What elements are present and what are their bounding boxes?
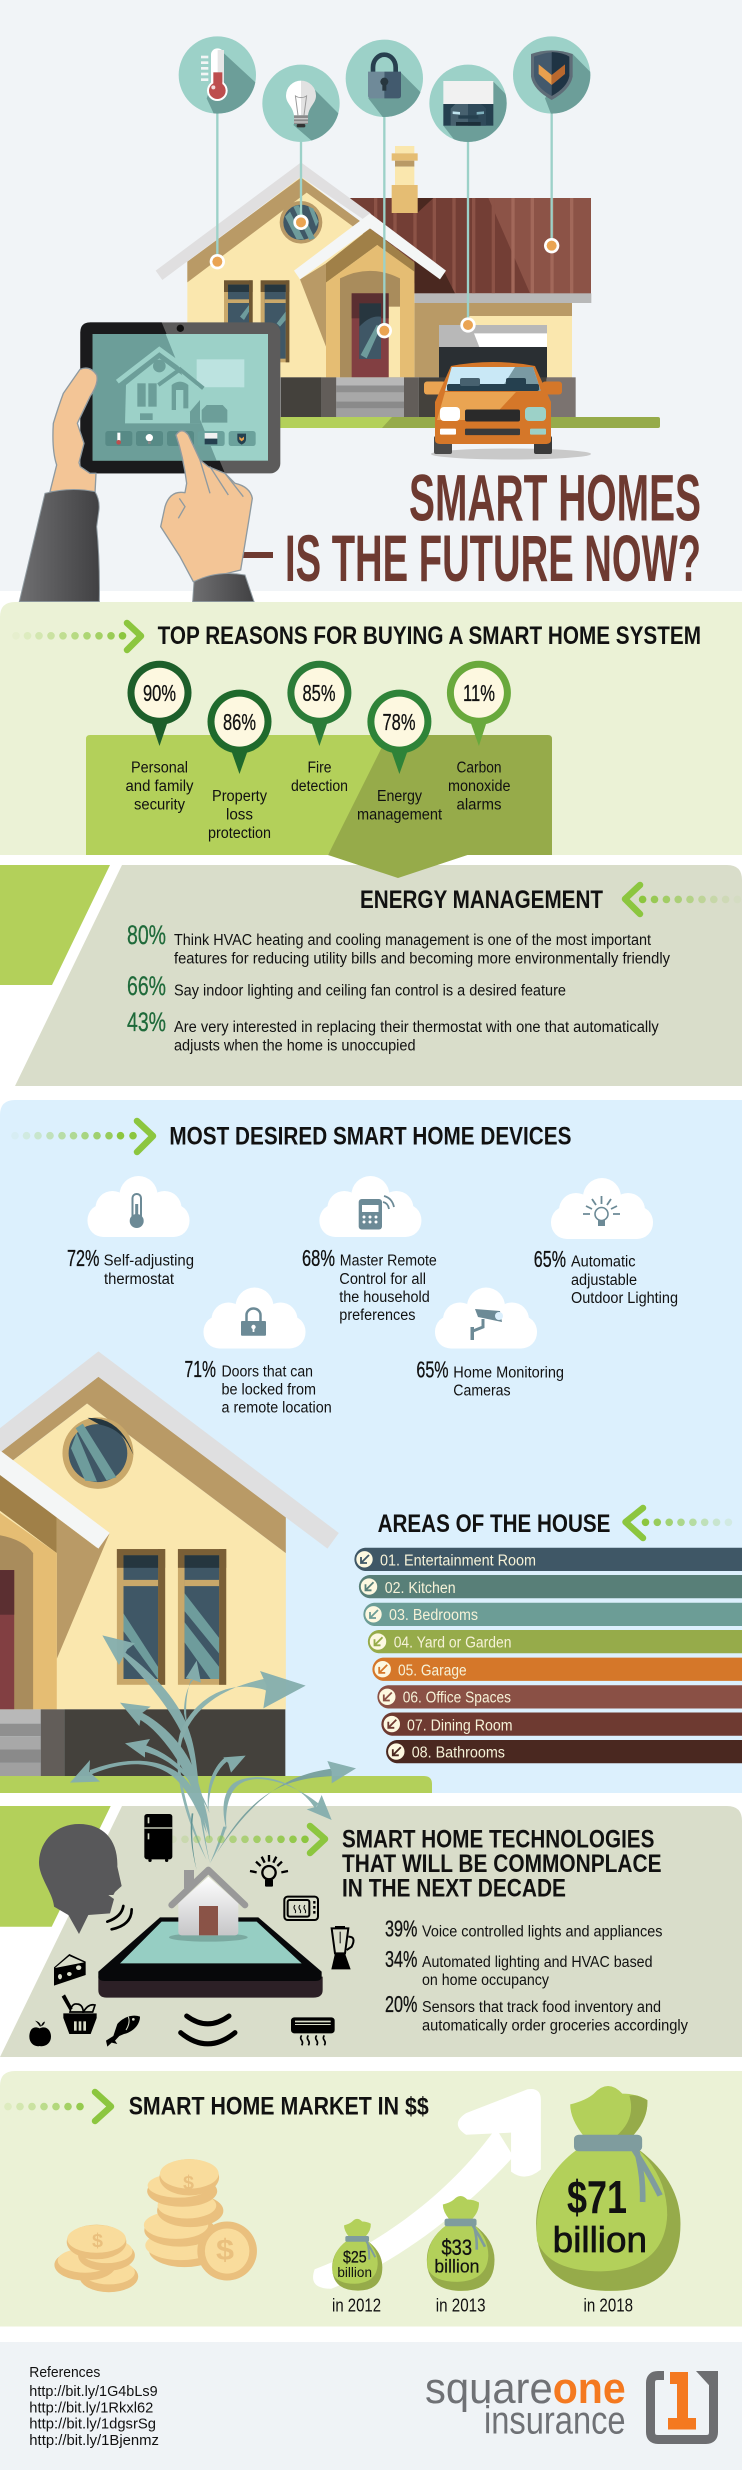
references: References	[29, 2364, 100, 2381]
icon: basket	[62, 1994, 97, 2034]
device: monitoring cameras: 65%	[416, 1357, 449, 1383]
coin piles	[54, 2159, 257, 2292]
heading: technologies: SMART HOME TECHNOLOGIES	[342, 1826, 654, 1854]
illustration: large house	[0, 1351, 339, 1776]
arrow: top reasons dots	[12, 623, 141, 650]
stat: 66% lighting: Say indoor lighting and ceiling fan control is a desired feature	[174, 982, 566, 1000]
icon: blender	[331, 1926, 354, 1969]
icon: padlock	[346, 40, 427, 120]
pin: 90% personal and family security: Personal	[131, 759, 188, 776]
arrow: tech dots	[157, 1826, 325, 1853]
pin: 86% property loss protection: protection	[208, 825, 271, 842]
panel: market	[0, 2071, 742, 2326]
icon: microwave	[284, 1897, 318, 1920]
icon: apple	[29, 2021, 51, 2046]
voice waves	[107, 1906, 132, 1929]
tablet	[80, 322, 280, 473]
device: master remote: Master Remote	[340, 1253, 437, 1270]
label: $71 billion in 2018: billion	[553, 2219, 647, 2260]
heading: energy management: ENERGY MANAGEMENT	[360, 886, 603, 914]
device: monitoring cameras	[416, 1288, 564, 1400]
label: $25 billion in 2012: billion	[337, 2265, 372, 2280]
stat: 43% thermostat: 43%	[127, 1007, 166, 1037]
label: $71 billion in 2018	[553, 2171, 647, 2316]
steps and foundation	[281, 377, 576, 417]
panel: smart home technologies	[0, 1806, 742, 2057]
label: $71 billion in 2018: $71	[567, 2171, 627, 2223]
illustration: hands holding tablet	[19, 322, 280, 602]
device: master remote: the household	[339, 1289, 430, 1306]
stat: 20% sensors: Sensors that track food inventory and	[422, 1999, 661, 2016]
area 01: 01. Entertainment Room	[380, 1553, 536, 1570]
stat: 39% voice: 39%	[385, 1916, 417, 1942]
illustration: market graphics	[54, 2086, 680, 2292]
device: remote door lock: Doors that can	[222, 1363, 313, 1380]
garage	[414, 303, 572, 379]
stat: 20% sensors: 20%	[385, 1991, 417, 2017]
left windows	[224, 280, 289, 362]
illustration: house with smart icons	[156, 36, 593, 417]
label: $25 billion in 2012	[332, 2248, 381, 2316]
area 01	[354, 1548, 742, 1571]
device: outdoor lighting: adjustable	[571, 1272, 637, 1289]
logo: square one insurance	[425, 2364, 718, 2443]
green side block	[0, 865, 110, 985]
stat: 20% sensors: automatically order groceries accordingly	[422, 2017, 688, 2034]
money bag: 2018	[536, 2086, 680, 2291]
references: http://bit.ly/1Bjenmz	[29, 2432, 159, 2449]
label: $33 billion in 2013: in 2013	[436, 2296, 486, 2316]
device: remote door lock: 71%	[184, 1356, 216, 1382]
references: http://bit.ly/1G4bLs9	[29, 2383, 158, 2400]
pin: 11% carbon monoxide alarms	[447, 661, 511, 814]
device: outdoor lighting	[534, 1178, 678, 1307]
area 05: 05. Garage	[398, 1662, 467, 1679]
device: remote door lock	[184, 1288, 332, 1416]
pin: 90% personal and family security: and family	[126, 778, 194, 795]
heading: areas of the house: AREAS OF THE HOUSE	[378, 1510, 610, 1538]
label: $33 billion in 2013	[434, 2235, 486, 2316]
device: thermostat: thermostat	[104, 1271, 175, 1288]
head speaking	[39, 1824, 122, 1934]
area 07: 07. Dining Room	[407, 1717, 512, 1734]
coin dollar signs: $	[92, 2231, 103, 2252]
area 06	[377, 1685, 742, 1708]
pin: 85% fire detection: detection	[291, 778, 348, 795]
arrows: fanning out from house	[70, 1635, 356, 1870]
right sleeve	[193, 573, 254, 602]
coin dollar signs: $	[183, 2173, 194, 2194]
icon: thermometer	[178, 36, 256, 114]
tablet platform	[98, 1917, 323, 1998]
device: master remote: preferences	[339, 1307, 416, 1324]
large house wall and roof	[0, 1351, 339, 1709]
pin: 85% fire detection: 85%	[302, 680, 336, 706]
chimney	[392, 146, 418, 213]
icon: bulb	[250, 1855, 288, 1887]
device: thermostat	[67, 1176, 194, 1288]
area 04	[368, 1630, 742, 1653]
device: monitoring cameras: Cameras	[453, 1382, 511, 1400]
logo: square one insurance: one	[553, 2364, 626, 2413]
device: master remote: 68%	[302, 1245, 335, 1271]
area 03: 03. Bedrooms	[389, 1607, 478, 1624]
icon: garage	[429, 65, 510, 145]
pin: 11% carbon monoxide alarms: 11%	[463, 680, 495, 706]
small house	[169, 1870, 248, 1942]
pin: 78% energy management: 78%	[382, 709, 416, 735]
arrow: energy management dots	[625, 885, 741, 914]
right hand	[161, 431, 252, 582]
label: $71 billion in 2018: in 2018	[584, 2296, 633, 2316]
heading: technologies: IN THE NEXT DECADE	[342, 1874, 566, 1902]
tech green block	[0, 1806, 111, 1927]
pin: 78% energy management	[357, 690, 443, 824]
stat: 20% sensors	[385, 1991, 688, 2034]
device: remote door lock: a remote location	[222, 1400, 332, 1416]
icon: cheese	[54, 1954, 86, 1986]
round attic window	[280, 201, 322, 244]
area 05	[372, 1658, 742, 1681]
porch	[294, 213, 446, 377]
stat: 34% automated: 34%	[385, 1946, 417, 1972]
panel: most desired devices	[0, 1100, 742, 1793]
pin: 11% carbon monoxide alarms: monoxide	[448, 778, 510, 795]
heading: devices: MOST DESIRED SMART HOME DEVICES	[169, 1123, 571, 1151]
stat: 66% lighting: 66%	[127, 971, 166, 1001]
illustration: smart appliances	[29, 1814, 354, 2047]
device: outdoor lighting: Automatic	[571, 1254, 636, 1270]
title	[243, 460, 701, 595]
pin: 11% carbon monoxide alarms: alarms	[456, 796, 502, 814]
connector dots	[210, 215, 559, 338]
device: outdoor lighting: 65%	[534, 1246, 566, 1272]
icon: air conditioner	[291, 2017, 335, 2045]
device: master remote	[302, 1176, 437, 1324]
area 07	[381, 1712, 742, 1736]
growth arrow	[313, 2089, 541, 2289]
area 06: 06. Office Spaces	[403, 1690, 511, 1707]
area 03	[363, 1603, 742, 1626]
area 08: 08. Bathrooms	[412, 1744, 505, 1762]
device: monitoring cameras: Home Monitoring	[453, 1365, 564, 1382]
device: thermostat: 72%	[67, 1245, 99, 1271]
label: $33 billion in 2013: $33	[442, 2235, 472, 2260]
reasons base	[86, 735, 392, 855]
stat: 43% thermostat: adjusts when the home is unoccupied	[174, 1037, 416, 1054]
coin dollar signs: $	[216, 2234, 234, 2267]
references: http://bit.ly/1dgsrSg	[29, 2415, 156, 2432]
icon: fridge	[144, 1814, 172, 1862]
stat: 34% automated: Automated lighting and HVAC based	[422, 1954, 652, 1971]
heading: technologies: THAT WILL BE COMMONPLACE	[342, 1850, 662, 1878]
pin: 86% property loss protection: loss	[226, 806, 253, 824]
device: remote door lock: be locked from	[222, 1382, 316, 1399]
money bag: 2013	[427, 2196, 495, 2291]
stat: 39% voice	[385, 1916, 663, 1942]
stat: 80% HVAC: 80%	[127, 920, 166, 950]
references	[29, 2364, 159, 2449]
arrow: devices dots	[11, 1121, 153, 1152]
large house grass	[0, 1776, 432, 1793]
grass strip	[280, 417, 660, 428]
label: $25 billion in 2012: in 2012	[332, 2296, 381, 2316]
pin: 78% energy management: management	[357, 806, 443, 824]
stat: 43% thermostat	[127, 1007, 659, 1054]
connector lines	[216, 108, 553, 331]
icon: shield	[513, 36, 590, 114]
large house round window	[62, 1417, 133, 1489]
stat: 80% HVAC: Think HVAC heating and cooling management is one of the most important	[174, 932, 652, 949]
label: $25 billion in 2012: $25	[343, 2248, 367, 2267]
list: areas of the house	[354, 1548, 742, 1763]
area 08	[386, 1740, 742, 1763]
pin: 90% personal and family security: security	[134, 796, 185, 814]
logo: square one insurance: square	[425, 2364, 553, 2413]
stat: 43% thermostat: Are very interested in replacing their thermostat with one that automatically	[174, 1019, 659, 1036]
pin: 11% carbon monoxide alarms: Carbon	[456, 759, 502, 776]
area 04: 04. Yard or Garden	[394, 1635, 512, 1652]
heading: market: SMART HOME MARKET IN $$	[129, 2092, 429, 2120]
pin: 90% personal and family security: 90%	[143, 680, 176, 706]
arrow: areas dots	[626, 1508, 732, 1538]
arrow: market dots	[4, 2092, 111, 2121]
area 02: 02. Kitchen	[385, 1580, 456, 1597]
main house wall	[156, 162, 414, 377]
heading: technologies	[342, 1826, 662, 1902]
device: master remote: Control for all	[339, 1271, 426, 1288]
stat: 39% voice: Voice controlled lights and appliances	[422, 1924, 663, 1941]
panel: energy management	[0, 865, 742, 1086]
footer background	[0, 2342, 742, 2470]
stat: 80% HVAC	[127, 920, 670, 967]
icon: fish	[106, 2016, 140, 2047]
pin: 85% fire detection: Fire	[308, 759, 332, 776]
pin: 86% property loss protection	[208, 690, 272, 842]
device: thermostat: Self-adjusting	[104, 1253, 194, 1270]
panel: top reasons	[0, 602, 742, 878]
icon: light bulb	[262, 65, 343, 145]
house roof	[350, 198, 591, 303]
logo: square one insurance: insurance	[484, 2400, 626, 2443]
pin: 86% property loss protection: Property	[212, 788, 267, 805]
hero background	[0, 0, 742, 591]
device: outdoor lighting: Outdoor Lighting	[571, 1290, 678, 1307]
pin: 90% personal and family security	[126, 661, 194, 814]
pin: 86% property loss protection: 86%	[223, 709, 256, 735]
left hand	[50, 368, 97, 493]
large house foundation	[0, 1709, 285, 1776]
area 02	[359, 1575, 742, 1598]
left sleeve	[19, 490, 99, 602]
icon: orange car	[424, 362, 591, 460]
money bag: 2012	[332, 2219, 382, 2291]
pin: 85% fire detection	[287, 661, 351, 795]
large house porch	[0, 1450, 110, 1709]
label: $33 billion in 2013: billion	[434, 2257, 479, 2277]
wireless signal	[181, 2016, 235, 2044]
stat: 34% automated	[385, 1946, 652, 1989]
stat: 66% lighting	[127, 971, 566, 1001]
large house windows	[117, 1549, 226, 1685]
stat: 80% HVAC: features for reducing utility bills and becoming more environmentally friendly	[174, 950, 670, 967]
pin: 78% energy management: Energy	[377, 788, 422, 805]
stat: 34% automated: on home occupancy	[422, 1972, 549, 1989]
references: http://bit.ly/1Rkxl62	[29, 2399, 153, 2416]
coin dollar signs	[92, 2173, 234, 2267]
